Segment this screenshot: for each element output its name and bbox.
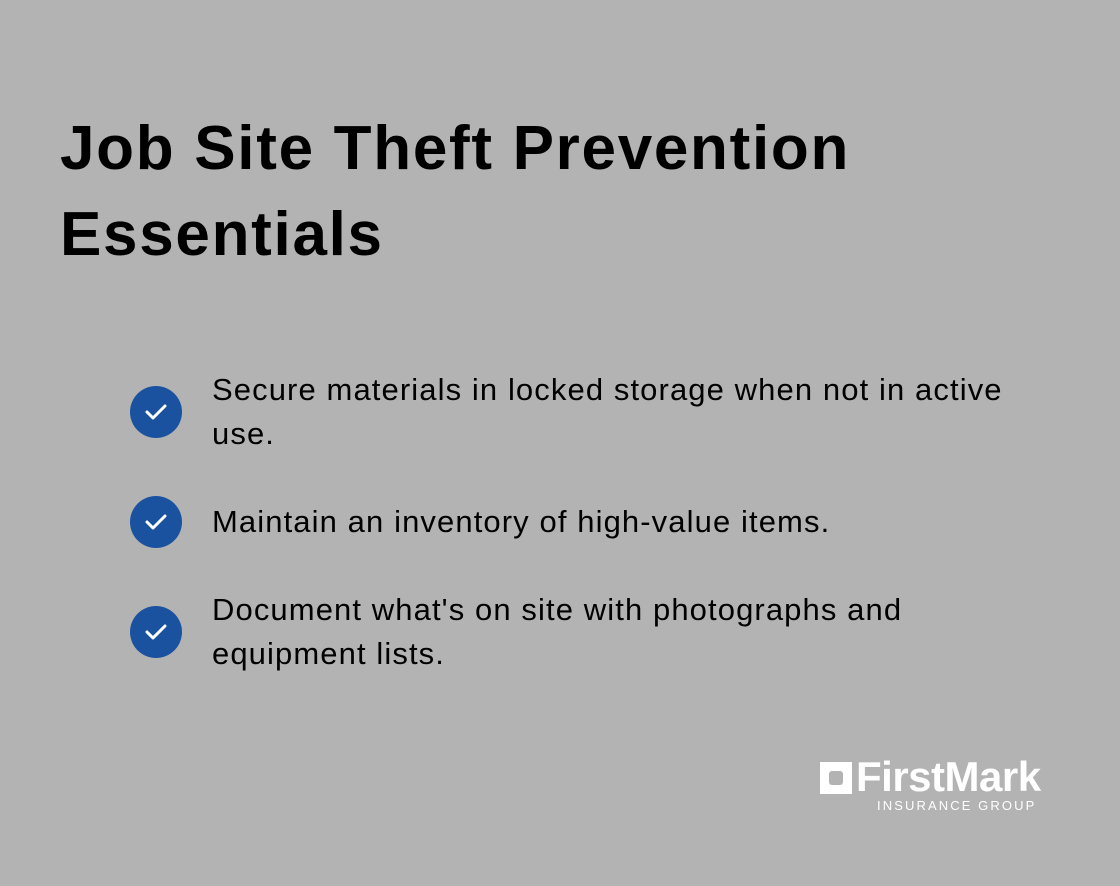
text (212, 372, 1003, 451)
logo: INSURANCE GROUP (877, 798, 1036, 813)
logo (820, 753, 1041, 813)
item: document (130, 592, 902, 671)
text: Document what's on site with photographs and (212, 592, 902, 627)
text: equipment lists. (212, 636, 445, 671)
text: Maintain an inventory of high-value items. (212, 504, 830, 539)
text (212, 592, 902, 671)
icon: check circle (130, 386, 182, 438)
logo: FirstMark (856, 753, 1041, 800)
text: use. (212, 416, 275, 451)
item: inventory (130, 496, 830, 548)
text: Secure materials in locked storage when not in active (212, 372, 1003, 407)
item: secure materials (130, 372, 1003, 451)
title: Essentials (60, 200, 384, 269)
title: Job Site Theft Prevention (60, 114, 850, 183)
icon: check circle (130, 496, 182, 548)
title (60, 114, 850, 269)
icon: check circle (130, 606, 182, 658)
